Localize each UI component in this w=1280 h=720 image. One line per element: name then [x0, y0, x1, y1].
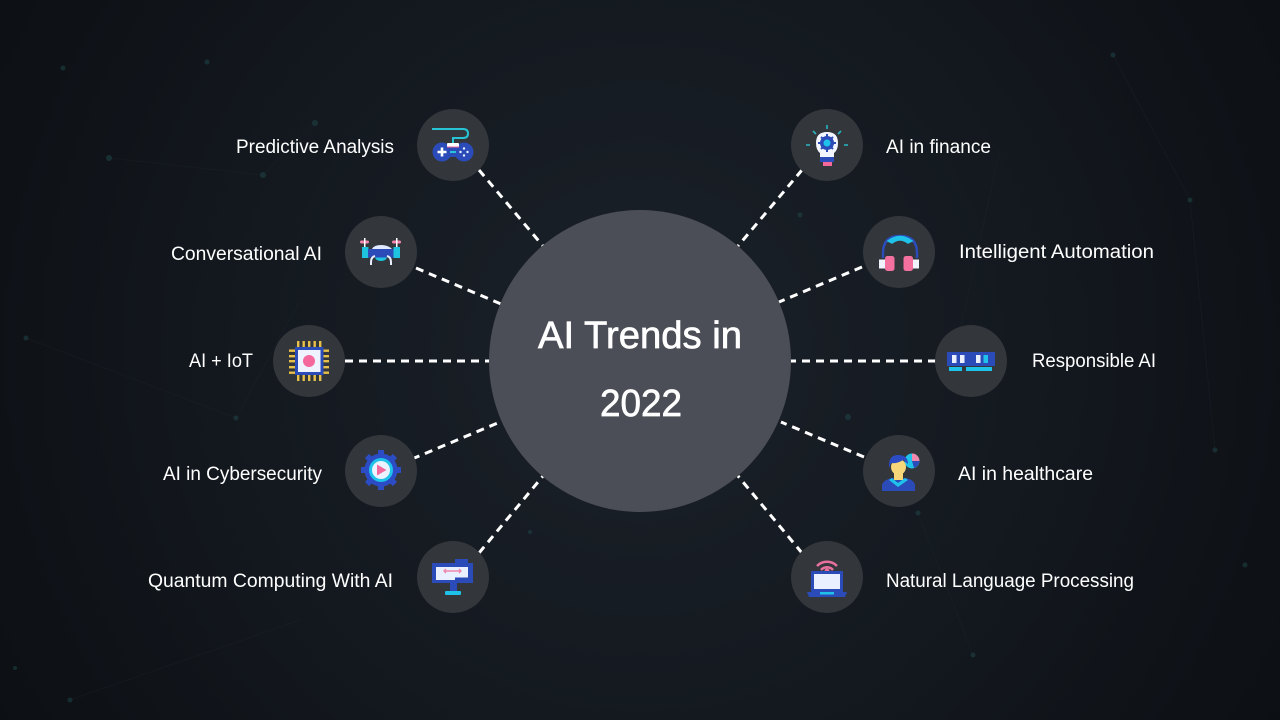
item: Intelligent Automation: [863, 216, 1154, 288]
title: AI Trends in: [538, 315, 742, 357]
label: AI in Cybersecurity: [163, 464, 322, 485]
icon: game controller: [432, 129, 474, 162]
label: Quantum Computing With AI: [148, 571, 393, 592]
icon: monitor: [432, 559, 473, 595]
connector lines: [345, 170, 936, 553]
icon: drone: [360, 238, 401, 265]
item: Responsible AI: [935, 325, 1156, 397]
icon: chip: [289, 341, 329, 381]
icon: light bulb: [806, 125, 848, 166]
icon: gear with play button: [361, 450, 401, 490]
label: Intelligent Automation: [959, 242, 1154, 263]
icon: laptop with wifi: [807, 562, 847, 597]
item: AI in finance: [791, 109, 991, 181]
item: Quantum Computing With AI: [148, 541, 489, 613]
item: AI in healthcare: [863, 435, 1093, 507]
label: Responsible AI: [1032, 351, 1156, 372]
item: AI in Cybersecurity: [163, 435, 417, 507]
central circle with title: [489, 210, 791, 512]
label: Natural Language Processing: [886, 571, 1134, 592]
label: Predictive Analysis: [236, 137, 394, 158]
label: AI in healthcare: [958, 464, 1093, 485]
item: Conversational AI: [171, 216, 417, 288]
title: 2022: [600, 383, 682, 425]
icon: person with pie chart: [882, 454, 920, 491]
label: Conversational AI: [171, 244, 322, 265]
title: [538, 315, 742, 425]
label: AI + IoT: [189, 351, 253, 372]
item: AI + IoT: [189, 325, 345, 397]
item: Natural Language Processing: [791, 541, 1134, 613]
icon: memory module: [947, 352, 995, 371]
item: Predictive Analysis: [236, 109, 489, 181]
icon: headphones: [879, 236, 919, 271]
label: AI in finance: [886, 137, 991, 158]
